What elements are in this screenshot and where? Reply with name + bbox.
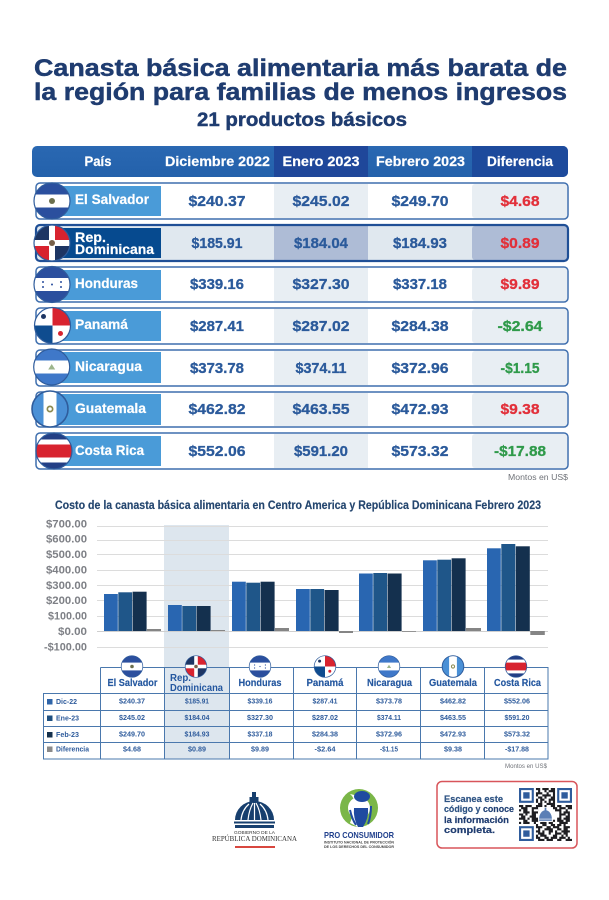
logo: Pro Consumidor: INSTITUTO NACIONAL DE PROTECCIÓN [324, 840, 394, 844]
chart legend [47, 699, 89, 754]
table values: Diferencia: $0.89 [188, 746, 206, 754]
table header: Diciembre 2022 [165, 153, 270, 169]
y axis labels: $300.00 [46, 580, 87, 592]
row: Rep. Dominicana: $184.04 [294, 235, 349, 252]
table values: Dic-22: $240.37 [119, 698, 145, 706]
table values: Ene-23: $245.02 [119, 715, 145, 722]
row: Rep. Dominicana: $0.89 [500, 235, 540, 252]
table values: Dic-22: $287.41 [312, 698, 338, 706]
callout text: la información [444, 815, 509, 826]
table values: Ene-23: $374.11 [377, 715, 401, 722]
y axis labels: $100.00 [48, 611, 87, 623]
bar chart [44, 518, 548, 654]
row: Honduras: $327.30 [292, 276, 350, 293]
y axis labels: $700.00 [46, 518, 87, 530]
table values: Dic-22: $462.82 [440, 698, 466, 706]
table country headings: Guatemala [429, 677, 477, 689]
table values: Dic-22 [119, 698, 530, 706]
bars: Panamá [296, 589, 353, 633]
y axis labels: $500.00 [46, 549, 87, 561]
row: Honduras [32, 264, 568, 304]
bars: Honduras [232, 582, 289, 631]
infographic [31, 58, 578, 849]
table flags [120, 654, 528, 678]
logo: Gobierno de la República Dominicana: REPÚBLICA DOMINICANA [212, 835, 297, 843]
table values: Dic-22: $339.16 [248, 698, 273, 706]
table values: Diferencia: $9.38 [444, 746, 462, 754]
row: Panamá: $284.38 [392, 318, 448, 335]
title: la región para familias de menos ingresos [34, 79, 567, 106]
row: Honduras: $337.18 [393, 276, 447, 293]
row: Guatemala: $462.82 [188, 401, 246, 418]
chart legend: Ene-23 [56, 716, 79, 722]
table values: Feb-23: $372.96 [376, 732, 402, 738]
bars: El Salvador [104, 592, 161, 631]
row: Panamá: $287.41 [190, 318, 244, 335]
row: El Salvador: $240.37 [188, 193, 246, 210]
table values: Feb-23: $284.38 [312, 732, 338, 738]
logo: Pro Consumidor: DE LOS DERECHOS DEL CONSUMIDOR [324, 845, 394, 849]
table country headings: El Salvador [108, 677, 158, 689]
QR centre dome [538, 807, 553, 822]
row: Rep. Dominicana [32, 223, 568, 263]
table values: Diferencia: -$2.64 [314, 746, 336, 754]
QR finder patterns [520, 789, 571, 840]
chart legend: Diferencia [56, 746, 89, 754]
title [34, 55, 567, 106]
table values: Ene-23: $184.04 [184, 715, 210, 722]
table values: Diferencia: -$1.15 [380, 746, 398, 754]
table values: Ene-23 [119, 715, 530, 722]
table header: Febrero 2023 [376, 153, 465, 169]
table values: Diferencia: -$17.88 [505, 746, 529, 754]
row: Costa Rica: $552.06 [188, 443, 246, 460]
table values: Dic-22: $185.91 [185, 698, 209, 706]
table values: Ene-23: $327.30 [247, 715, 273, 722]
row: Nicaragua: Nicaragua [75, 358, 142, 374]
table country headings [108, 672, 541, 694]
row: Nicaragua: $374.11 [296, 360, 346, 377]
row: Rep. Dominicana: Dominicana [75, 241, 154, 257]
y axis labels: $400.00 [46, 564, 87, 576]
table country headings: Honduras [238, 677, 282, 689]
callout text: completa. [444, 825, 495, 836]
highlight column: República Dominicana [164, 525, 229, 759]
table values: Ene-23: $591.20 [504, 715, 530, 722]
table values: Ene-23: $287.02 [312, 715, 338, 722]
y axis labels [44, 518, 87, 654]
row: Honduras: $339.16 [190, 276, 244, 293]
icon: dome [234, 792, 275, 828]
row: El Salvador: El Salvador [75, 191, 150, 207]
table country headings: Costa Rica [494, 677, 541, 689]
title: Canasta básica alimentaria más barata de [34, 55, 567, 82]
y axis labels: $0.00 [58, 626, 87, 638]
row: Panamá: -$2.64 [498, 318, 543, 335]
row: El Salvador: $245.02 [292, 193, 350, 210]
row: Rep. Dominicana: Rep. [75, 229, 106, 245]
y axis labels: -$100.00 [44, 642, 87, 654]
row: Honduras: $9.89 [500, 276, 540, 293]
row: Nicaragua: $372.96 [392, 360, 448, 377]
table values: Ene-23: $463.55 [440, 715, 466, 722]
row: Panamá: $287.02 [292, 318, 350, 335]
table country headings: Panamá [306, 677, 344, 689]
subtitle: 21 productos básicos [197, 110, 407, 131]
row: Nicaragua: $373.78 [190, 360, 244, 377]
row: Guatemala: Guatemala [75, 400, 146, 416]
note: top table currency: Montos en US$ [508, 473, 569, 482]
row: Panamá [32, 306, 568, 346]
bars: Rep. Dominicana [168, 605, 225, 631]
icon: Pro Consumidor emblem [340, 789, 378, 827]
table country headings: Dominicana [170, 682, 223, 694]
row: Costa Rica [34, 431, 568, 471]
row: Rep. Dominicana: $184.93 [393, 235, 447, 252]
callout: QR [437, 782, 577, 848]
row: Guatemala: $9.38 [500, 401, 540, 418]
data table [44, 654, 548, 759]
row: El Salvador: $249.70 [392, 193, 448, 210]
table header: País [84, 153, 112, 169]
table values: Feb-23: $573.32 [504, 732, 530, 738]
row: Panamá: Panamá [75, 316, 128, 332]
row: Costa Rica: Costa Rica [75, 442, 144, 458]
row: El Salvador: $4.68 [500, 193, 540, 210]
row: Costa Rica: $591.20 [294, 443, 348, 460]
table values: Diferencia [123, 746, 529, 754]
logo: Pro Consumidor: PRO CONSUMIDOR [324, 830, 394, 840]
table header [32, 146, 568, 177]
bars: Nicaragua [359, 573, 416, 632]
chart title: Costo de la canasta básica alimentaria en Centro America y República Dominicana Febrero 2023 [55, 500, 541, 512]
row: Guatemala [30, 389, 568, 429]
logo: Gobierno de la República Dominicana [212, 792, 297, 848]
y axis labels: $600.00 [46, 534, 87, 546]
table country headings: Nicaragua [367, 677, 412, 689]
row: Guatemala: $463.55 [292, 401, 350, 418]
chart legend: Dic-22 [56, 699, 77, 706]
bars: Guatemala [423, 558, 481, 631]
callout text: código y conoce [444, 804, 514, 815]
table values: Feb-23: $337.18 [248, 732, 273, 738]
y axis labels: $200.00 [46, 595, 87, 607]
table values: Feb-23: $249.70 [119, 732, 145, 738]
chart legend: Feb-23 [56, 732, 79, 739]
callout text: Escanea este [444, 794, 503, 805]
row: Nicaragua: -$1.15 [500, 360, 540, 377]
row: Costa Rica: $573.32 [392, 443, 448, 460]
table values: Feb-23 [119, 732, 530, 738]
row: Nicaragua [32, 347, 568, 387]
icon: QR code [519, 789, 572, 840]
logo: Pro Consumidor [324, 789, 394, 849]
table header: Enero 2023 [282, 153, 360, 169]
row: El Salvador [32, 181, 568, 221]
table values: Dic-22: $373.78 [376, 698, 402, 706]
bars: Costa Rica [487, 544, 545, 635]
logo: Gobierno de la República Dominicana: GOBIERNO DE LA [234, 830, 275, 835]
table values: Feb-23: $184.93 [184, 732, 210, 738]
row: Honduras: Honduras [75, 275, 138, 291]
table values: Dic-22: $552.06 [504, 698, 530, 706]
row: Costa Rica: -$17.88 [494, 443, 546, 460]
row: Rep. Dominicana: $185.91 [192, 235, 242, 252]
table header: Diferencia [487, 153, 553, 169]
table values: Diferencia: $9.89 [251, 746, 269, 754]
table values: Diferencia: $4.68 [123, 746, 141, 754]
callout text [444, 794, 514, 836]
table country headings: Rep. [170, 672, 191, 684]
row: Guatemala: $472.93 [392, 401, 448, 418]
table values: Feb-23: $472.93 [440, 732, 466, 738]
note: lower table currency: Montos en US$ [505, 764, 548, 770]
